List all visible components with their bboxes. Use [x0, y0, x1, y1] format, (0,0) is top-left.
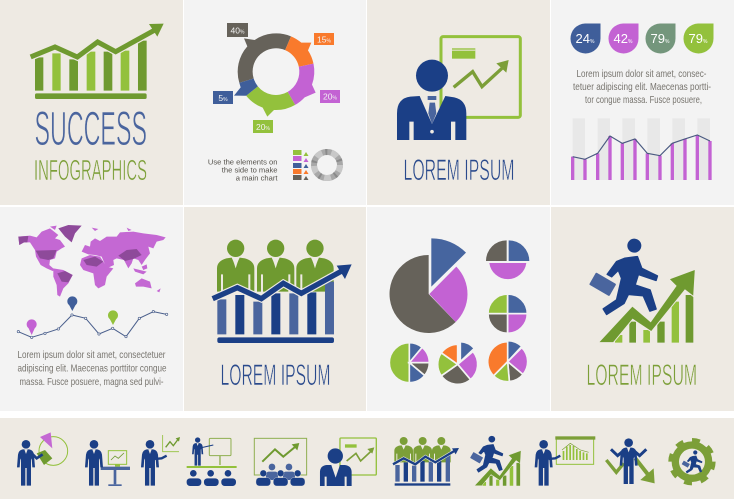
icon: presenter with pie — [17, 432, 68, 486]
donut chart with callouts — [234, 33, 316, 117]
icon: presenter bust and board — [320, 438, 376, 486]
label: 15%: 15% — [317, 34, 332, 44]
drop: 42% — [609, 24, 638, 53]
small pie: four quarters — [488, 294, 527, 333]
text block: massa. Fusce posuere, magna sed pulvi- — [20, 376, 164, 388]
drop: 79% green — [684, 24, 714, 53]
panel: runner — [551, 207, 734, 411]
icon: team and growth bars — [393, 437, 459, 486]
large exploded pie — [390, 238, 468, 333]
drop: 42%: 42% — [614, 31, 633, 46]
panel: donut chart — [184, 0, 366, 205]
panel: pie charts — [367, 207, 550, 411]
icon: confused person with falling arrow — [606, 438, 655, 484]
panel: success title: SUCCESS — [34, 103, 147, 156]
drop: 79% green: 79% — [689, 31, 708, 46]
panel: presenter — [367, 0, 550, 205]
drop: 24% — [571, 24, 600, 53]
icon: presenter at board — [397, 37, 520, 140]
label: 15% — [314, 33, 334, 45]
heading: infographics: INFOGRAPHICS — [34, 155, 147, 187]
text block: adipiscing elit. Maecenas porttitor congue — [18, 362, 167, 374]
icon: person pointing at chart — [141, 435, 180, 486]
heading: lorem ipsum: LOREM IPSUM — [220, 359, 330, 392]
logo: rising bar chart — [31, 24, 164, 99]
instruction text — [208, 158, 278, 182]
text block — [18, 349, 167, 388]
gray ring — [314, 152, 340, 178]
icon: audience and board — [254, 438, 307, 486]
label: 5%: 5% — [218, 93, 228, 103]
instruction text: the side to make — [222, 166, 278, 174]
small pie: five slices — [438, 342, 478, 384]
icon: presenter with audience — [187, 437, 237, 486]
small pie: half purple — [486, 240, 529, 279]
line chart with pins — [17, 296, 168, 338]
heading: lorem ipsum: LOREM IPSUM — [404, 154, 514, 187]
small pie: half green — [389, 343, 429, 383]
instruction text: Use the elements on — [208, 158, 278, 166]
small pie: large orange — [488, 341, 528, 382]
legend swatches — [293, 150, 308, 180]
icon: person with declining chart board — [535, 436, 595, 486]
icon: person at desk monitor — [85, 440, 130, 486]
icon: team above rising bars — [213, 240, 352, 343]
label: 20% green: 20% — [256, 122, 271, 132]
drop: 24%: 24% — [576, 31, 595, 46]
drop: 79% grey green: 79% — [651, 31, 670, 46]
world map — [18, 225, 166, 297]
icon: runner with arrow — [470, 436, 521, 486]
panel: success title — [0, 0, 183, 205]
column and line chart — [571, 118, 712, 180]
icon: businessman running up arrow — [589, 239, 695, 343]
panel: percent drops and column chart — [551, 0, 734, 205]
text block: Lorem ipsum dolor sit amet, consectetuer — [18, 349, 166, 361]
label: 20% purple — [320, 90, 340, 103]
label: 5% — [213, 91, 233, 104]
label: 20% purple: 20% — [323, 92, 338, 102]
instruction text: a main chart — [236, 174, 278, 182]
panel: team growth — [184, 207, 366, 411]
icon: gear with runner — [670, 440, 714, 483]
label: 20% green — [253, 120, 273, 133]
text block — [573, 68, 711, 106]
panel: world map — [0, 207, 183, 411]
panel: icon strip — [0, 418, 734, 499]
label: 40% — [227, 23, 248, 37]
drop: 79% grey green — [646, 24, 676, 53]
label: 40%: 40% — [231, 26, 245, 36]
